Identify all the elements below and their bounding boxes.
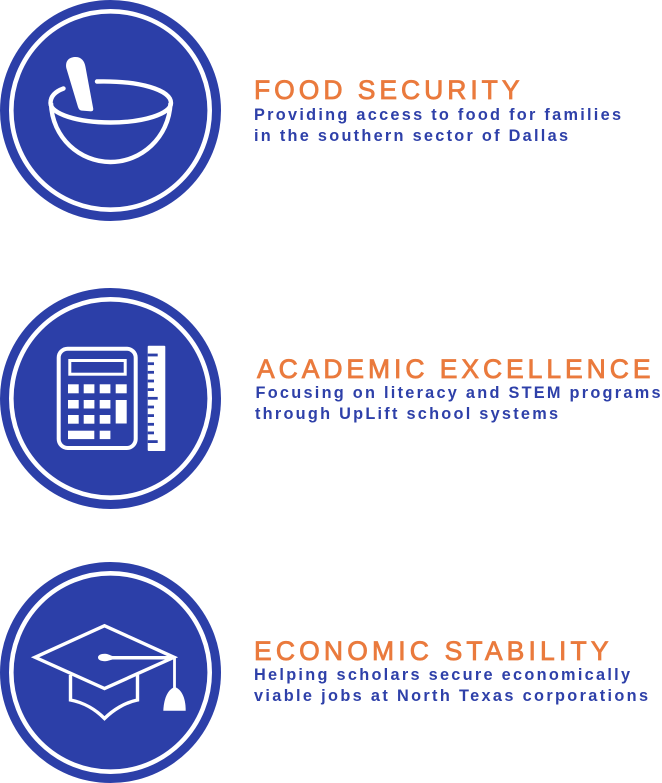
text: food security description: in the southern sector of Dallas [254, 127, 568, 145]
heading: food security: FOOD SECURITY [254, 75, 520, 105]
panel: academic excellence [0, 288, 660, 509]
icon: bowl and pestle badge [0, 0, 221, 221]
panel: food security [0, 0, 621, 221]
text: economic stability description: Helping scholars secure economically [254, 666, 630, 684]
heading: academic excellence: ACADEMIC EXCELLENCE [257, 354, 650, 384]
icon: graduation cap badge [0, 562, 221, 783]
text: food security description: Providing access to food for families [254, 106, 621, 124]
panel: economic stability [0, 562, 648, 783]
text: academic excellence description: through UpLift school systems [255, 405, 558, 423]
icon: calculator and ruler badge [0, 288, 221, 509]
text: economic stability description: viable jobs at North Texas corporations [254, 687, 648, 705]
text: academic excellence description: Focusing on literacy and STEM programs [256, 384, 660, 402]
heading: economic stability: ECONOMIC STABILITY [254, 636, 609, 666]
